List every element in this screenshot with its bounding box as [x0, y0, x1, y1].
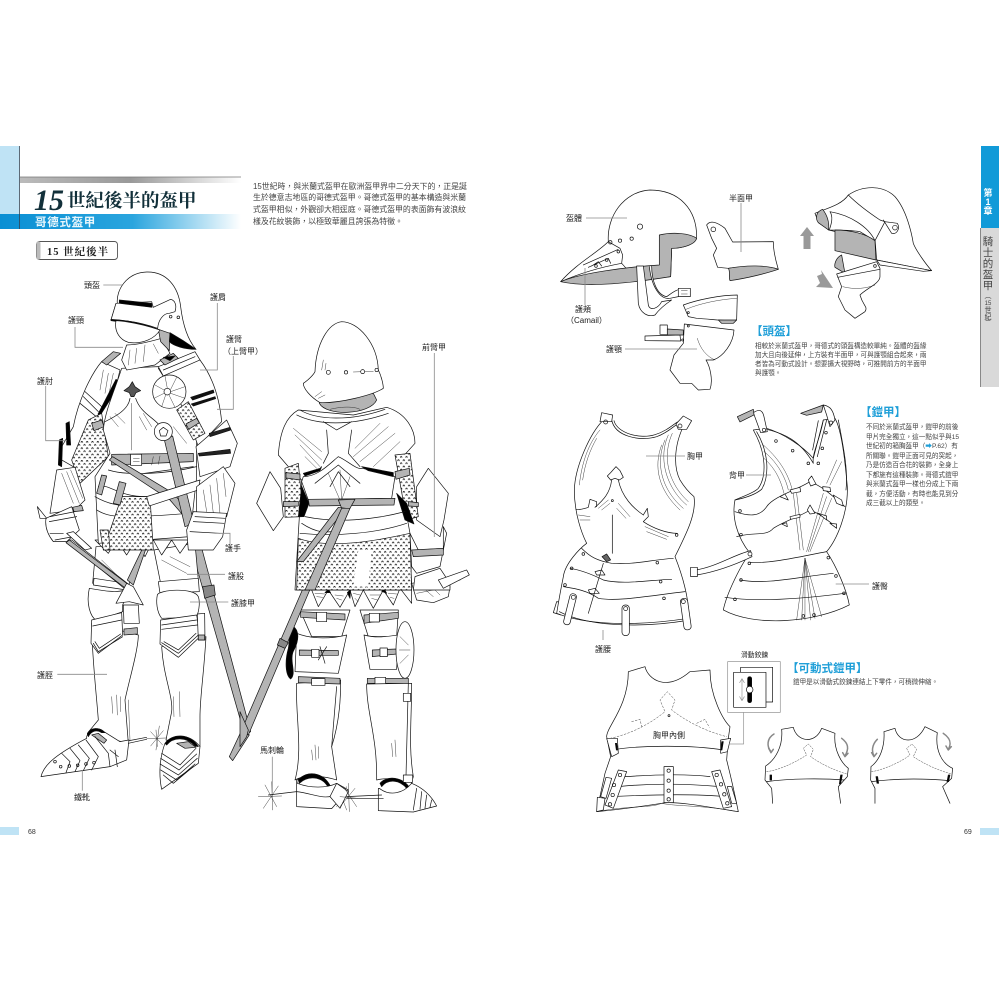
- text block: 頭盔: 與護顎。: [755, 368, 781, 377]
- label: 胸甲內側: 胸甲內側: [653, 730, 685, 740]
- subtitle: 哥德式盔甲: [35, 215, 96, 229]
- title: [34, 184, 197, 217]
- label: 前臂甲: 前臂甲: [422, 342, 446, 352]
- label: 馬刺輪: 馬刺輪: [260, 745, 284, 755]
- chapter title: 15: [985, 301, 992, 307]
- helmet: [111, 272, 196, 349]
- spur right: [347, 795, 383, 798]
- page number 69: [964, 828, 999, 836]
- text block: 鎧甲: 截，方便活動，有時也能見到分: [866, 489, 959, 498]
- label: 頭盔: 頭盔: [84, 280, 100, 290]
- right gauntlet: [197, 467, 235, 517]
- waist lames: [300, 512, 407, 535]
- sword blade: [164, 436, 194, 527]
- label: 盔體: 盔體: [566, 213, 582, 223]
- hand and dagger: [412, 580, 450, 603]
- gorget: [122, 338, 170, 370]
- helmet illustrations: [561, 188, 932, 390]
- intro text block: 樣及花紋裝飾，以極致華麗且誇張為特徵。: [253, 216, 403, 226]
- left leg: [300, 610, 350, 637]
- fleur: [607, 467, 623, 480]
- left gauntlet: [50, 467, 85, 513]
- text block: 頭盔: [755, 341, 927, 377]
- chapter title: 紀: [984, 312, 992, 321]
- lower bevor: [670, 324, 734, 390]
- label: 護膝甲: 護膝甲: [231, 598, 255, 608]
- illustration: front knight upper body: [37, 272, 237, 550]
- label: 護頰 Camail: [566, 304, 607, 325]
- right leg: [360, 610, 398, 637]
- chapter title: ︵: [984, 293, 992, 300]
- cuirass interior outline: [597, 667, 738, 812]
- chapter title: [983, 235, 994, 327]
- long scabbard: [189, 542, 251, 736]
- text block: 頭盔: 相較於米蘭式盔甲，哥德式的頭盔構造較單純。盔體的盔緣: [755, 341, 927, 350]
- right sabaton: [160, 736, 200, 789]
- label: 護顎: 護顎: [606, 344, 622, 354]
- sliding hinge box: [728, 662, 780, 744]
- chapter title: 世: [984, 305, 992, 314]
- text block: 可動式鎧甲: 鎧甲是以滑動式鉸鍊連結上下零件，可稍微伸縮。: [793, 677, 938, 686]
- left page header decoration: [0, 146, 241, 229]
- label: 護手: 護手: [225, 543, 241, 553]
- illustration: rear knight upper body: [257, 322, 469, 590]
- section tag: 15世紀後半: [36, 242, 118, 260]
- label: 護肩: 護肩: [210, 292, 226, 302]
- rondel: [153, 375, 186, 408]
- text block: 鎧甲: 所關聯。鎧甲正面可見的突起，: [866, 451, 958, 460]
- black blob: [286, 626, 298, 679]
- label: 上臂甲: （上臂甲）: [223, 346, 263, 356]
- back straps: [753, 410, 767, 433]
- poleyns: [88, 588, 127, 621]
- forearm: [410, 527, 447, 573]
- label: 護臂: 護臂: [226, 334, 242, 344]
- page number 68: 68: [28, 829, 36, 836]
- text block: 頭盔: 加大且向後延伸，上方裝有半面甲，可與護顎組合起來，兩: [755, 350, 927, 359]
- half visor: [707, 222, 778, 269]
- chapter number: 章: [983, 205, 993, 216]
- chapter title: 甲: [983, 280, 993, 292]
- label: 護肘: 護肘: [37, 376, 53, 386]
- intro text block: 15世紀時，與米蘭式盔甲在歐洲盔甲界中二分天下的，正是誕: [253, 181, 467, 191]
- chapter tab: [980, 146, 999, 387]
- illustration: rear knight lower body: [240, 580, 460, 812]
- label: 護頰 Camail: 護頰: [575, 304, 591, 314]
- chapter title: 騎: [983, 235, 994, 248]
- hilt band: [147, 480, 200, 506]
- rotation arrows: [768, 734, 848, 757]
- label: 護股: 護股: [228, 571, 244, 581]
- right upper arm: [158, 357, 222, 447]
- arrow: up: [800, 227, 814, 249]
- chapter title: 盔: [983, 268, 993, 281]
- mail skirt: [297, 533, 412, 590]
- sword: [242, 580, 314, 735]
- purse straps: [97, 475, 107, 495]
- heading: 鎧甲: 【鎧甲】: [860, 405, 906, 419]
- diagonal straps: [297, 507, 346, 562]
- illustration: breastplate front and back: [553, 405, 849, 636]
- belt: [112, 453, 193, 465]
- chin straps: [637, 266, 672, 316]
- chapter number: [983, 187, 993, 216]
- chapter title: 士: [983, 246, 993, 259]
- page number 69: 69: [964, 829, 972, 836]
- side strap: [645, 335, 681, 341]
- illustration: front knight lower body: [41, 540, 251, 789]
- label: 護頰 Camail: （Camail）: [566, 316, 607, 325]
- front tabs: [563, 593, 577, 625]
- mail: [103, 497, 153, 550]
- page number 68: [0, 827, 36, 836]
- small breastplate left: [765, 727, 848, 803]
- title: 15: [34, 184, 64, 217]
- section tag: 15世紀後半: 15 世紀後半: [47, 245, 109, 258]
- label: 半面甲: 半面甲: [729, 193, 753, 203]
- label: 背甲: 背甲: [729, 470, 745, 480]
- title: 世紀後半的盔甲: [67, 190, 197, 212]
- text block: 鎧甲: 世紀初的箱胸盔甲（➡P.62）有: [866, 441, 958, 450]
- skirt lames: [95, 467, 197, 517]
- text block: 鎧甲: 不同於米蘭式盔甲，鎧甲的前後: [866, 422, 959, 431]
- spur left: [268, 792, 337, 797]
- diagonal strap: [109, 457, 193, 523]
- elbow cops: [257, 472, 283, 531]
- helmet: [319, 393, 377, 412]
- text block: 頭盔: 者皆為可動式設計。想要擴大視野時，可推開前方的半面甲: [755, 359, 926, 368]
- label: 胸甲: 胸甲: [687, 451, 703, 461]
- heading: 可動式鎧甲: 【可動式鎧甲】: [787, 661, 868, 675]
- skirt teeth: [95, 540, 189, 557]
- heading: 頭盔: 【頭盔】: [751, 324, 797, 338]
- chest ridges: [105, 398, 158, 424]
- leader lines: left page: [46, 285, 434, 793]
- front cuirass: [557, 420, 694, 624]
- front skirt straps behind: [553, 602, 566, 615]
- label: 護脛: 護脛: [37, 670, 53, 680]
- left arm: [62, 362, 120, 467]
- small breastplate right: [871, 727, 953, 803]
- chapter title: 的: [983, 257, 993, 270]
- right forearm: [196, 420, 237, 477]
- label: 護頸: 護頸: [68, 315, 84, 325]
- text block: 鎧甲: 乃是仿造百合花的裝飾，全身上: [866, 460, 959, 469]
- arrow: down: [816, 270, 833, 288]
- torso: [278, 407, 415, 590]
- left sabaton: [41, 729, 129, 777]
- label: 護臀: 護臀: [872, 581, 888, 591]
- text block: 鎧甲: [866, 422, 959, 507]
- leader lines: helmet: [585, 203, 741, 349]
- text block: 鎧甲: 下都施有這種裝飾。哥德式鎧甲: [866, 470, 958, 479]
- arm mail: [285, 463, 303, 517]
- illustration: inside of breastplate with sliding hinge: [597, 662, 953, 812]
- leader lines: cuirass: [603, 456, 869, 640]
- greaves: [87, 623, 138, 743]
- sallet side view: [608, 190, 697, 280]
- helmet three-quarter view: [848, 188, 932, 271]
- mail skirt end teeth: [297, 582, 412, 608]
- torso: [95, 367, 197, 543]
- intro text block: 生於德意志地區的哥德式盔甲。哥德式盔甲的基本構造與米蘭: [253, 192, 466, 202]
- spur: [128, 737, 147, 743]
- label: 滑動鉸鍊: 滑動鉸鍊: [741, 650, 768, 659]
- intro text block: 式盔甲相似，外觀卻大相逕庭。哥德式盔甲的表面飾有波浪紋: [253, 204, 466, 214]
- belt: [308, 498, 395, 506]
- intro text block: [253, 181, 467, 226]
- chapter title: ︶: [984, 318, 992, 327]
- sword tip: [67, 532, 92, 550]
- upper bevor: [683, 295, 737, 321]
- label: 鐵靴: 鐵靴: [74, 792, 90, 802]
- sword diagonal: [65, 540, 132, 592]
- side strap and buckle: [696, 551, 752, 575]
- back cuirass: [723, 418, 849, 621]
- text block: 鎧甲: 與米蘭式盔甲一樣也分成上下兩: [866, 479, 959, 488]
- text block: 鎧甲: 甲片完全獨立，這一點似乎與15: [866, 432, 959, 441]
- chapter number: 1: [985, 197, 991, 207]
- chapter number: 第: [983, 187, 993, 198]
- text block: 鎧甲: 成三截以上的類型。: [866, 498, 925, 507]
- labels: left page: [37, 280, 446, 802]
- thighs: [93, 543, 145, 590]
- label: 護腰: 護腰: [595, 644, 611, 654]
